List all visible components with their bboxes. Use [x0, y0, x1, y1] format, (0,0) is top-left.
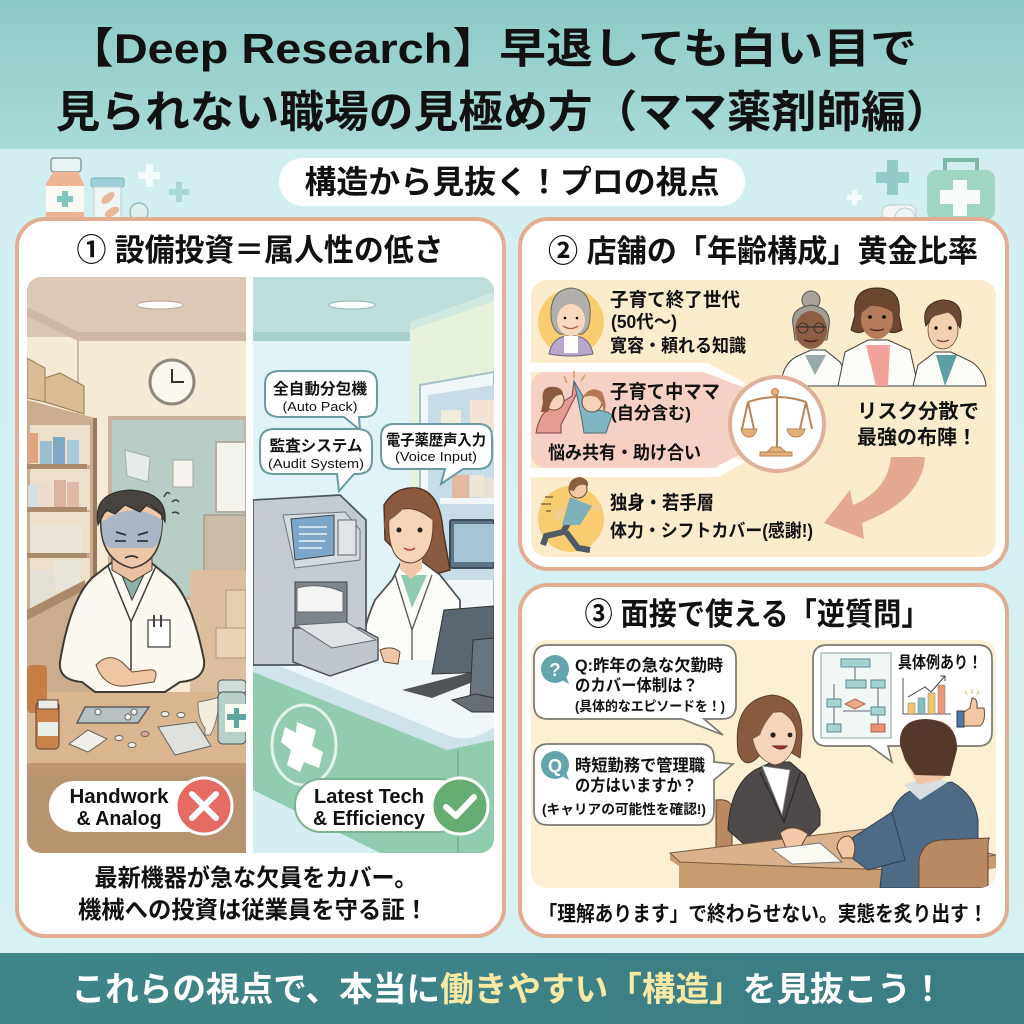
panel 1 caption: [78, 864, 428, 924]
three pharmacists: [781, 288, 986, 386]
shelves right: [420, 372, 494, 610]
cross circle: [272, 705, 336, 785]
paper: [772, 843, 842, 864]
label: Handwork: & Analog: [76, 808, 162, 830]
clock: [150, 360, 194, 404]
illustration: modern pharmacy: [253, 277, 494, 853]
title: 見られない職場の見極め方（ママ薬剤師編）: [56, 88, 951, 137]
icon: thumbs up: [957, 689, 984, 727]
decoration: plus signs left: [138, 164, 189, 202]
bubble: example: [813, 645, 992, 762]
panel: 逆質問: [520, 585, 1007, 936]
row: pink: [531, 372, 745, 468]
label: Handwork: Handwork: [70, 786, 169, 808]
title: 【Deep Research】早退しても白い目で: [67, 25, 917, 72]
bubble: question 2: [534, 744, 733, 825]
chair woman: [716, 800, 732, 850]
bubble: voice input: [381, 424, 492, 484]
bubble: auto pack: (Auto Pack): [282, 399, 358, 414]
bottom banner: これらの視点で、本当に働きやすい「構造」を見抜こう！: [72, 971, 944, 1009]
bubble: question 1: [534, 645, 736, 735]
bubble: auto pack: 全自動分包機: [273, 379, 367, 398]
subtitle pill: [279, 158, 745, 206]
label: Handwork: [49, 778, 232, 834]
pharmacist: middle: [838, 288, 918, 386]
row 1: veteran: (50代〜): [611, 312, 677, 332]
chair man: [919, 838, 990, 888]
bubble: example: 具体例あり！: [898, 653, 982, 672]
man interviewer: [837, 719, 978, 888]
subtitle pill: 構造から見抜く！プロの視点: [304, 164, 720, 200]
bubble: question 1: (具体的なエピソードを！): [575, 698, 725, 714]
label: latest tech: & Efficiency: [313, 808, 426, 830]
icon: runner: [538, 477, 604, 552]
callout: リスク分散で: [857, 400, 979, 423]
dispensing machine: [253, 495, 378, 676]
panel 3 heading: ③ 面接で使える「逆質問」: [584, 597, 930, 632]
row 2: mama: (自分含む): [611, 403, 691, 423]
row 1: veteran: 寛容・頼れる知識: [610, 335, 746, 356]
row 3: young: 独身・若手層: [610, 492, 714, 514]
man pharmacist: [60, 490, 204, 692]
bubble: audit system: 監査システム: [270, 437, 362, 455]
panel 1 caption: 機械への投資は従業員を守る証！: [78, 897, 428, 924]
row 1: veteran: 子育て終了世代: [610, 289, 740, 311]
pharmacist: senior: [781, 291, 846, 386]
bubble: auto pack: [265, 371, 377, 430]
panel 2 heading: ② 店舗の「年齢構成」黄金比率: [548, 234, 978, 269]
pharmacist: young: [913, 300, 986, 386]
counter: [280, 660, 494, 738]
row 2: mama: 子育て中ママ: [610, 381, 720, 403]
panel 1 caption: 最新機器が急な欠員をカバー。: [94, 864, 418, 892]
row 3: young: [538, 477, 813, 552]
bubble: audit system: (Audit System): [268, 456, 364, 471]
woman interviewer: [728, 695, 820, 845]
desk: [670, 854, 996, 888]
interview background: [531, 640, 996, 888]
keyboard: [402, 673, 471, 698]
bottom banner: [0, 953, 1024, 1024]
arrow: [824, 457, 925, 539]
label: latest tech: [295, 778, 488, 834]
row 2: mama: 悩み共有・助け合い: [548, 443, 701, 463]
decoration: medicine bottles left: [46, 158, 148, 221]
bubble: question 2: の方はいますか？: [575, 775, 697, 795]
cream background: [531, 280, 996, 557]
bubble: question 2: (キャリアの可能性を確認!): [542, 801, 706, 817]
row 3: young: 体力・シフトカバー(感謝!): [610, 520, 813, 541]
worried marks: [164, 493, 179, 514]
panel: 年齢構成: [520, 219, 1007, 569]
label: latest tech: Latest Tech: [314, 786, 424, 808]
panel: 設備投資: [17, 219, 504, 936]
desk items: [27, 665, 246, 755]
illustration: analog pharmacy: [27, 277, 246, 853]
row 1: veteran: [538, 288, 746, 356]
bubble: voice input: (Voice Input): [395, 449, 477, 464]
bubble: voice input: 電子薬歴声入力: [386, 431, 486, 449]
monitor: [432, 606, 494, 712]
bubble: audit system: [260, 429, 372, 491]
row 2: mama: [536, 371, 720, 463]
shelves: [27, 358, 95, 692]
icon: Q: [541, 751, 569, 780]
icon: Q: Q: [548, 756, 562, 776]
icon: question mark: ?: [550, 660, 560, 680]
flowchart: [821, 653, 891, 738]
icon: elder woman: [538, 288, 604, 356]
callout: 最強の布陣！: [857, 426, 977, 449]
callout: [857, 400, 979, 449]
notice board: [110, 418, 246, 598]
bubble: question 1: のカバー体制は？: [575, 676, 698, 695]
icon: cross: [176, 778, 232, 834]
decoration: first-aid kit right: [847, 160, 995, 228]
icon: high-five: [536, 371, 612, 433]
icon: check: [432, 778, 488, 834]
panel 1 heading: ① 設備投資＝属人性の低さ: [76, 233, 444, 268]
cabinet: [204, 515, 246, 575]
illustration: interview: [670, 695, 996, 888]
bubble: question 1: Q:昨年の急な欠勤時: [575, 655, 723, 675]
woman's hands: [780, 828, 808, 848]
title: [56, 25, 951, 137]
header band: [0, 0, 1024, 149]
icon: balance scale: [730, 377, 824, 471]
bubble: question 2: 時短勤務で管理職: [575, 755, 705, 775]
counter: [27, 692, 246, 763]
woman pharmacist: [364, 488, 460, 672]
woman's hand: [380, 648, 400, 664]
icon: question mark: [541, 655, 569, 684]
bar chart: [903, 676, 951, 714]
